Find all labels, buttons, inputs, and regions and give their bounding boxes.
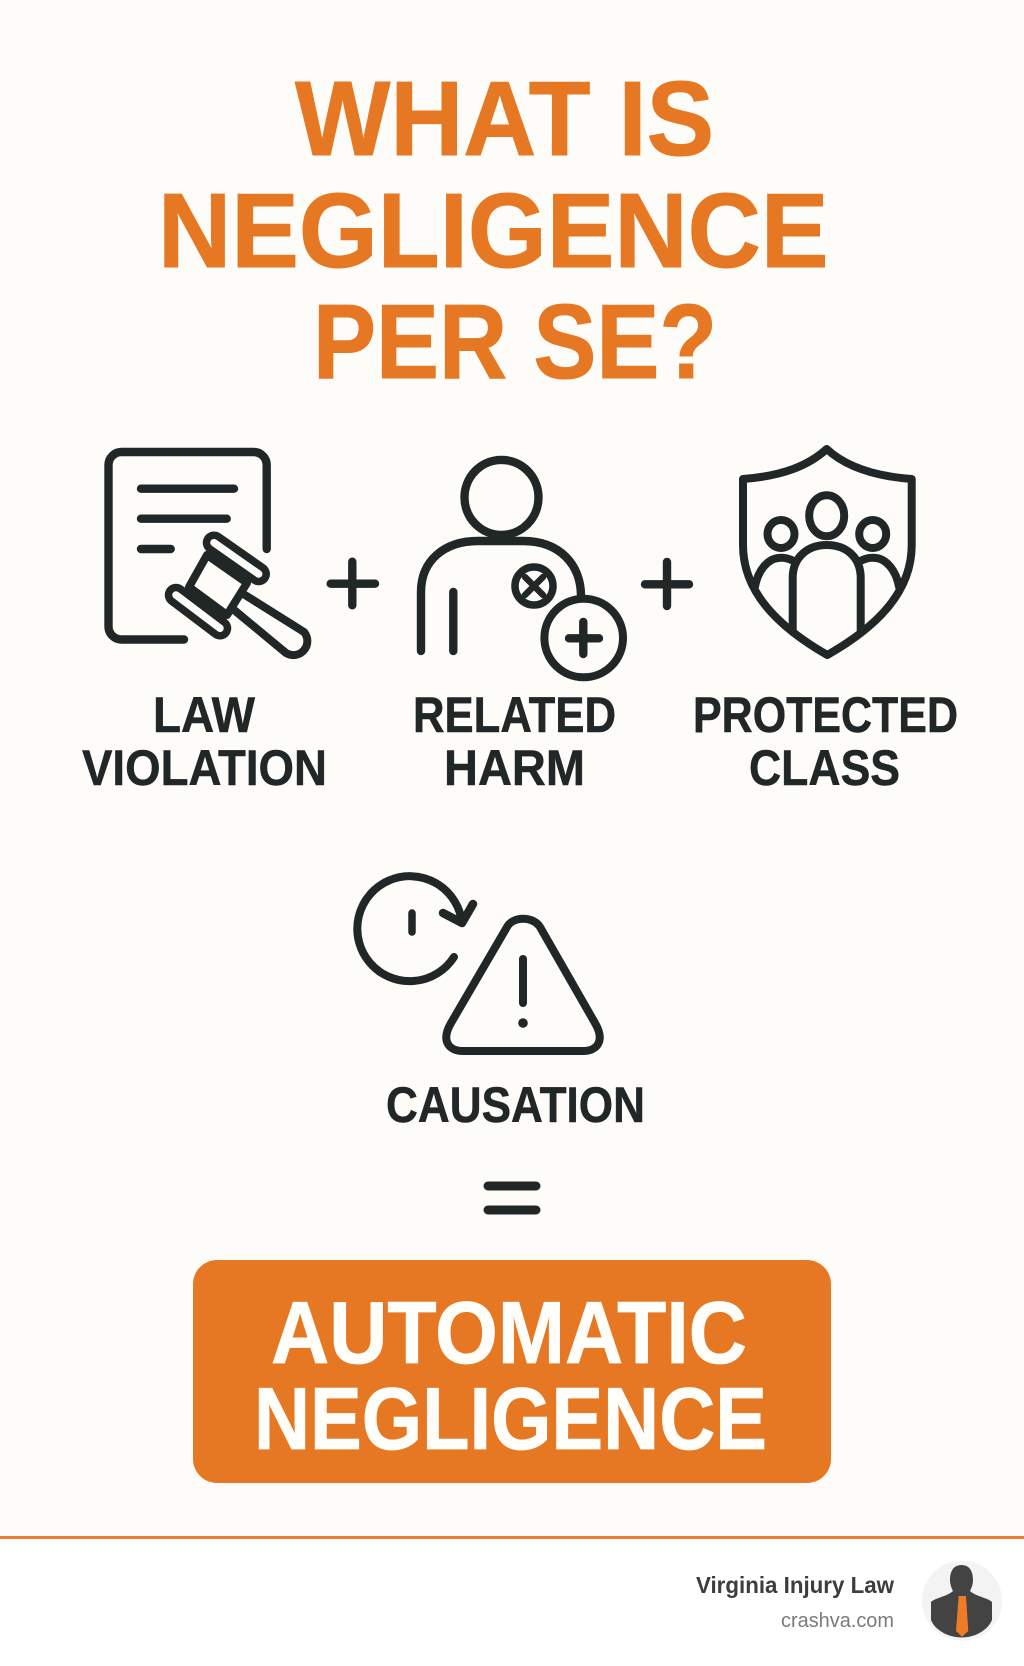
result text: AUTOMATIC [271,1283,747,1382]
label: causation: CAUSATION [386,1076,645,1133]
title: PER SE? [313,283,717,401]
label: related harm [413,686,616,796]
website: crashva.com [781,1610,894,1632]
result text: NEGLIGENCE [254,1369,767,1468]
title [158,60,828,401]
label: protected class: PROTECTED [693,686,958,743]
label: related harm: RELATED [413,686,616,743]
icon: shield with people [743,449,912,655]
label: law violation: VIOLATION [82,739,327,796]
icon: plus sign 1 [331,562,375,605]
icon: clock and warning triangle [357,876,600,1051]
icon: equals sign [488,1186,536,1210]
icon: plus sign 2 [645,562,689,606]
firm name: Virginia Injury Law [696,1572,894,1598]
title: WHAT IS [295,60,714,178]
logo: attorney silhouette [922,1561,1002,1641]
label: protected class [693,686,958,796]
title: NEGLIGENCE [158,172,828,290]
label: related harm: HARM [444,739,585,796]
label: protected class: CLASS [749,739,900,796]
label: law violation [82,686,327,796]
footer [0,1536,1024,1666]
icon: law document with gavel [108,452,307,655]
result box [193,1260,831,1483]
label: law violation: LAW [153,686,255,743]
icon: person with harm markers [421,460,623,677]
result text [254,1283,767,1468]
